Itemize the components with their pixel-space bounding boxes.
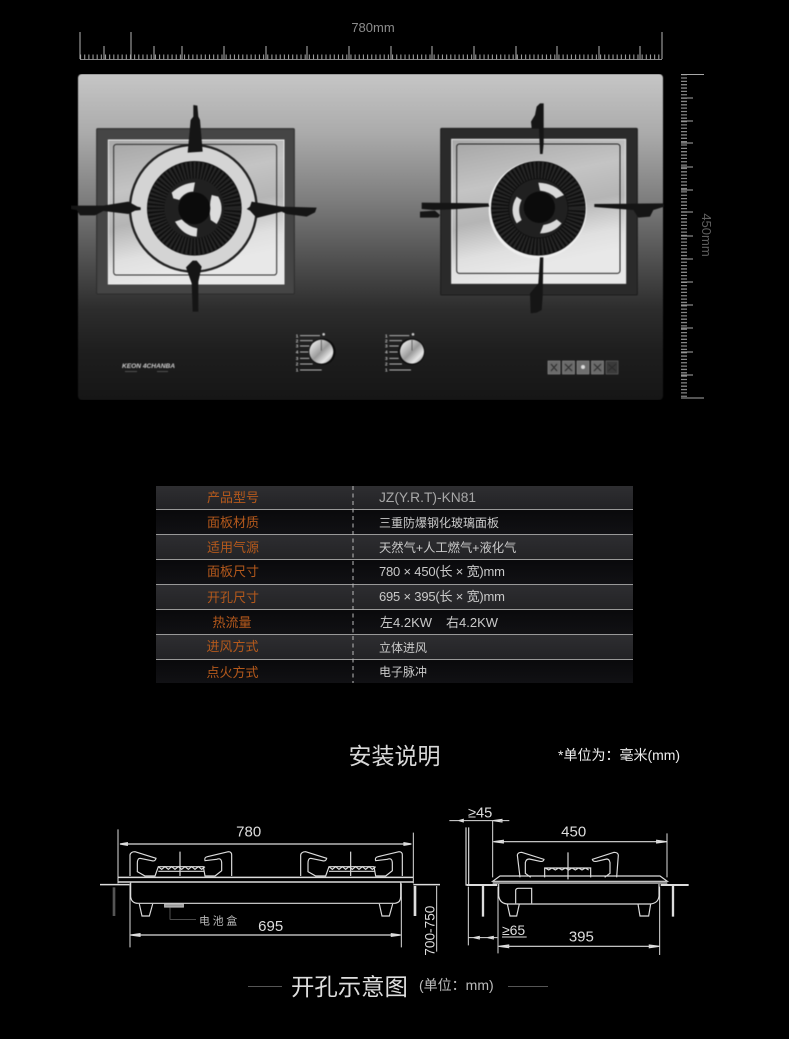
dimension label: 450mm: 450mm xyxy=(699,213,714,257)
heading text: 开孔示意图 xyxy=(291,974,408,1000)
heading unit: (单位：mm) xyxy=(419,977,494,993)
row values: 780 × 450(长 × 宽)mm xyxy=(379,564,505,579)
left grate arms xyxy=(71,105,317,312)
left knob and scale xyxy=(296,333,336,373)
left pan ring xyxy=(130,145,257,272)
right knob numbers: 2 xyxy=(385,362,388,367)
right knob and scale xyxy=(385,333,425,373)
right knob face xyxy=(400,340,424,364)
right grate arms xyxy=(420,103,664,313)
right burner xyxy=(420,103,664,313)
row labels: 开孔尺寸 xyxy=(207,590,259,605)
row labels: 面板尺寸 xyxy=(207,564,259,579)
front battery box xyxy=(165,904,183,907)
left burner xyxy=(71,105,317,312)
diagram: side view xyxy=(449,805,689,955)
left knob numbers: 4 xyxy=(296,350,299,355)
row dividers xyxy=(156,510,633,660)
row values: 电子脉冲 xyxy=(379,664,427,679)
row labels: 热流量 xyxy=(212,615,252,630)
side width arrow 395 xyxy=(499,945,659,948)
left knob face xyxy=(309,340,333,364)
right knob numbers: 1 xyxy=(385,368,388,373)
front feet xyxy=(139,904,393,916)
side wall xyxy=(466,827,493,885)
glass surface xyxy=(78,74,663,400)
right knob numbers: 3 xyxy=(385,344,388,349)
right burner base xyxy=(491,161,586,256)
left burner frame xyxy=(97,129,294,294)
battery label: 电池盒 xyxy=(199,914,240,928)
right knob numbers xyxy=(385,333,388,373)
row values: 左4.2KW xyxy=(380,615,433,630)
left tray recess xyxy=(114,144,277,275)
left burner fins xyxy=(156,170,233,247)
front cut-out label: 695 xyxy=(258,918,283,935)
row labels: 适用气源 xyxy=(207,540,259,555)
right steel tray xyxy=(452,139,626,283)
right knob dot xyxy=(412,333,414,336)
right burner frame xyxy=(441,128,637,295)
row labels xyxy=(206,490,259,680)
left knob numbers: 3 xyxy=(296,344,299,349)
left knob numbers: 1 xyxy=(296,368,299,373)
heading: cut-out diagram xyxy=(248,974,548,1000)
front width label: 780 xyxy=(236,824,261,841)
front supports xyxy=(110,887,118,916)
left burner core xyxy=(164,178,224,238)
row backgrounds xyxy=(156,486,633,683)
right burner core xyxy=(509,179,568,238)
left burner cap xyxy=(178,192,210,224)
clearance arrow 65 xyxy=(469,936,527,939)
row labels: 进风方式 xyxy=(206,639,259,654)
right knob numbers: 4 xyxy=(385,350,388,355)
unit note: *单位为：毫米(mm) xyxy=(558,747,680,763)
heading rule right xyxy=(508,986,548,988)
row labels: 点火方式 xyxy=(206,665,259,680)
right ruler xyxy=(681,74,704,398)
top ruler xyxy=(80,32,662,60)
dimension label: 780mm: 780mm xyxy=(351,20,395,35)
left burner openings xyxy=(172,182,222,237)
row values: 天然气+人工燃气+液化气 xyxy=(379,540,516,555)
battery leader xyxy=(170,907,196,919)
right knob pointer xyxy=(411,340,413,351)
right burner halo xyxy=(489,161,587,259)
row values: 三重防爆钢化玻璃面板 xyxy=(379,515,499,530)
side countertop xyxy=(467,882,689,888)
row labels: 产品型号 xyxy=(207,490,259,505)
height label: 700-750 xyxy=(423,905,438,956)
front grate right xyxy=(301,852,402,876)
heading: install guide: 安装说明 xyxy=(348,743,440,769)
front width arrow 780 xyxy=(120,843,411,845)
brand underline xyxy=(125,370,168,372)
row labels: 面板材质 xyxy=(207,515,259,530)
side grates xyxy=(517,852,618,879)
side extension lines xyxy=(468,821,667,955)
front cooktop body xyxy=(131,883,401,903)
left knob numbers: 3 xyxy=(296,356,299,361)
row values xyxy=(379,490,516,679)
panel: glass cooktop xyxy=(71,74,664,400)
right burner fins xyxy=(500,170,577,247)
right burner cap xyxy=(524,192,555,223)
side width label: 450 xyxy=(561,824,586,841)
front burner right xyxy=(329,867,376,871)
spec table xyxy=(156,486,633,683)
row values: 695 × 395(长 × 宽)mm xyxy=(379,589,505,604)
right knob xyxy=(398,338,425,365)
row values: JZ(Y.R.T)-KN81 xyxy=(379,490,476,505)
right burner openings xyxy=(512,183,564,233)
left knob dot xyxy=(322,333,325,336)
left knob numbers xyxy=(296,333,299,373)
diagram: front view xyxy=(100,824,440,956)
side feet xyxy=(507,904,651,916)
heading rule left xyxy=(248,986,282,988)
side cut-out label: 395 xyxy=(569,928,594,945)
left steel tray xyxy=(108,140,284,284)
left burner base xyxy=(147,161,242,256)
feature icons xyxy=(548,361,618,374)
front countertop and glass xyxy=(100,877,440,885)
right knob numbers: 1 xyxy=(385,333,388,338)
right tray recess xyxy=(457,144,620,273)
side width arrow 450 xyxy=(493,840,667,843)
front burner left xyxy=(158,867,205,871)
brand logo xyxy=(122,363,175,372)
side glass xyxy=(493,876,667,883)
brand name: KEON 4CHANBA xyxy=(122,363,175,370)
side burner xyxy=(545,868,591,877)
row values: 右4.2KW xyxy=(446,615,499,630)
left knob pointer xyxy=(320,340,323,351)
row values: 立体进风 xyxy=(379,640,427,655)
right knob numbers: 2 xyxy=(385,338,388,343)
column divider xyxy=(352,486,354,683)
left knob numbers: 2 xyxy=(296,362,299,367)
left knob numbers: 2 xyxy=(296,338,299,343)
right knob scale xyxy=(389,336,411,370)
left knob numbers: 1 xyxy=(296,333,299,338)
front grate left xyxy=(130,852,232,876)
left knob scale xyxy=(300,336,322,370)
clearance arrow 45 xyxy=(449,819,509,822)
side body xyxy=(499,884,659,904)
front extension lines xyxy=(118,829,437,952)
clearance label 45: ≥45 xyxy=(468,805,492,821)
front width arrow 695 xyxy=(131,934,401,936)
right knob numbers: 3 xyxy=(385,356,388,361)
side supports xyxy=(483,886,673,917)
clearance label 65: ≥65 xyxy=(502,922,525,938)
left knob xyxy=(309,338,336,365)
side battery housing xyxy=(516,888,532,903)
